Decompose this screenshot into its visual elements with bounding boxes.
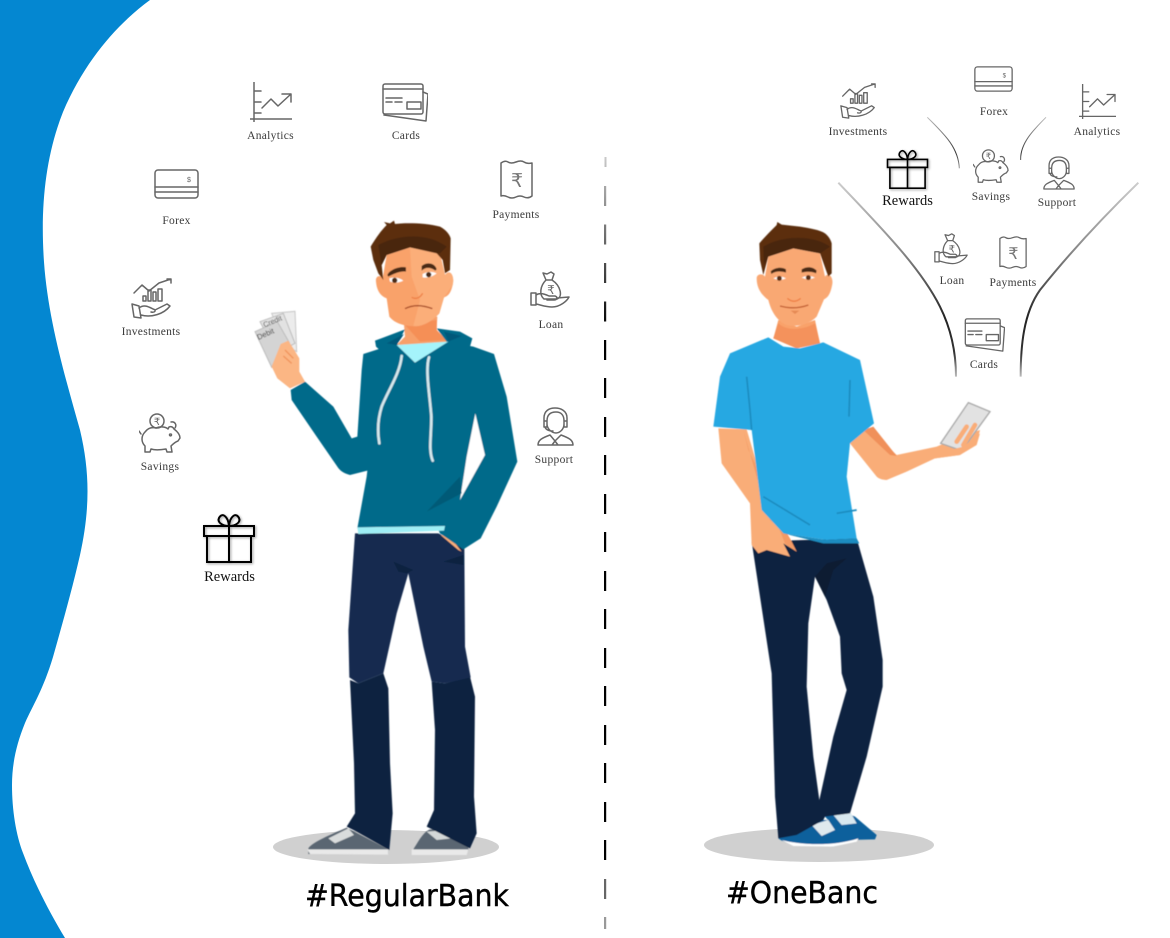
icon: analytics xyxy=(1074,84,1121,138)
icon: payments xyxy=(989,237,1037,289)
divider: dashed line xyxy=(604,157,606,929)
shirt, arms and head xyxy=(713,222,990,557)
heading: #RegularBank: #RegularBank xyxy=(305,879,510,914)
legs and shoes xyxy=(307,533,477,855)
icon: forex xyxy=(975,67,1012,118)
icon: support xyxy=(535,408,574,466)
icon: loan xyxy=(531,272,569,331)
icon: investments: Investments xyxy=(122,326,181,338)
icon: savings: Savings xyxy=(141,461,179,473)
illustration: unhappy man in teal hoodie xyxy=(255,221,517,855)
funnel curves xyxy=(838,117,1138,377)
icon: rewards xyxy=(204,515,255,585)
icon: cards xyxy=(965,319,1005,371)
icon: support: Support xyxy=(1038,197,1077,209)
icon: investments xyxy=(122,279,181,338)
hoodie, head and hand xyxy=(255,221,517,549)
blue wave background xyxy=(0,0,150,938)
icon: cards xyxy=(383,84,428,142)
icon: forex: Forex xyxy=(162,215,191,227)
icon: payments xyxy=(492,161,540,221)
icon: savings xyxy=(139,414,180,473)
ground shadow: left man xyxy=(273,830,499,864)
icon: investments xyxy=(829,84,888,138)
icon: support xyxy=(1038,157,1077,209)
icon: forex: Forex xyxy=(980,106,1008,118)
icon: investments: Investments xyxy=(829,126,888,138)
illustration: happy man in blue t-shirt xyxy=(713,222,990,847)
icon: rewards: Rewards xyxy=(882,193,933,209)
trousers and shoes xyxy=(752,538,883,847)
icon: rewards: Rewards xyxy=(204,569,255,585)
icon: savings: Savings xyxy=(972,191,1010,203)
icon: cards: Cards xyxy=(970,359,998,371)
icon: loan: Loan xyxy=(940,275,964,287)
icon: loan: Loan xyxy=(539,319,563,331)
icon: cards: Cards xyxy=(392,130,420,142)
icon: analytics xyxy=(247,82,294,142)
icon: support: Support xyxy=(535,454,574,466)
icon: analytics: Analytics xyxy=(1074,126,1121,138)
cards in hand: Credit xyxy=(262,314,283,329)
icon: rewards xyxy=(882,151,933,209)
icon: payments: Payments xyxy=(989,277,1037,289)
icon: savings xyxy=(972,150,1010,203)
icon: forex xyxy=(155,170,198,227)
icon: payments: Payments xyxy=(492,209,540,221)
icon: loan xyxy=(935,234,967,287)
panel: regular bank icons xyxy=(122,82,574,585)
heading: #OneBanc: #OneBanc xyxy=(726,876,878,911)
panel: OneBanc icons xyxy=(829,67,1121,371)
ground shadow: right man xyxy=(704,828,934,862)
icon: analytics: Analytics xyxy=(247,130,294,142)
cards in hand: Debit xyxy=(255,326,276,342)
cards in hand xyxy=(255,311,297,367)
